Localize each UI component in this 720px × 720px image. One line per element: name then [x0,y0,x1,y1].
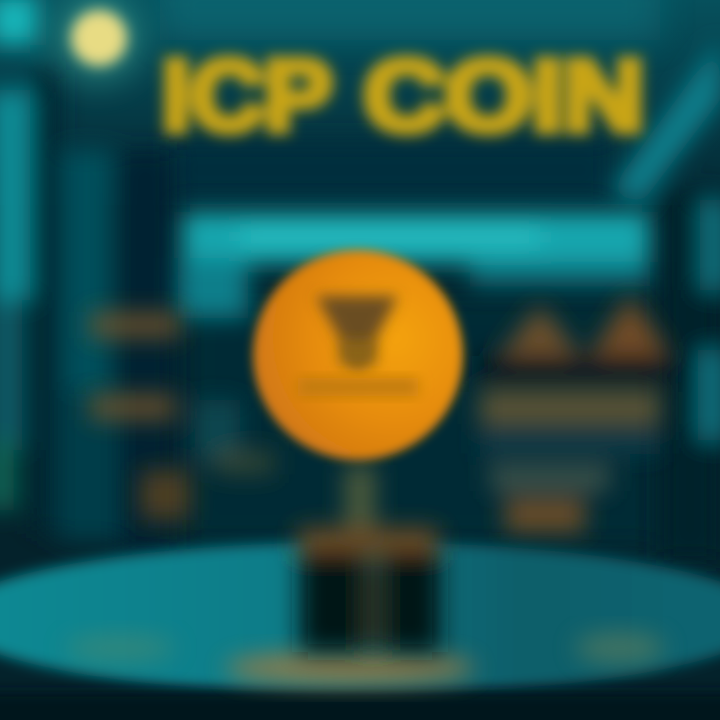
lamp [52,0,144,84]
left wall columns [0,0,173,550]
title: COIN [364,40,644,152]
shelves right [480,295,670,532]
coin emblem [298,296,418,396]
coin stand [298,465,440,652]
floor platform [0,542,720,720]
title: ICP [162,40,332,152]
right wall [610,40,720,560]
title [162,40,644,152]
teal light band [178,212,650,318]
coin [253,250,463,460]
shelves left [90,312,275,520]
